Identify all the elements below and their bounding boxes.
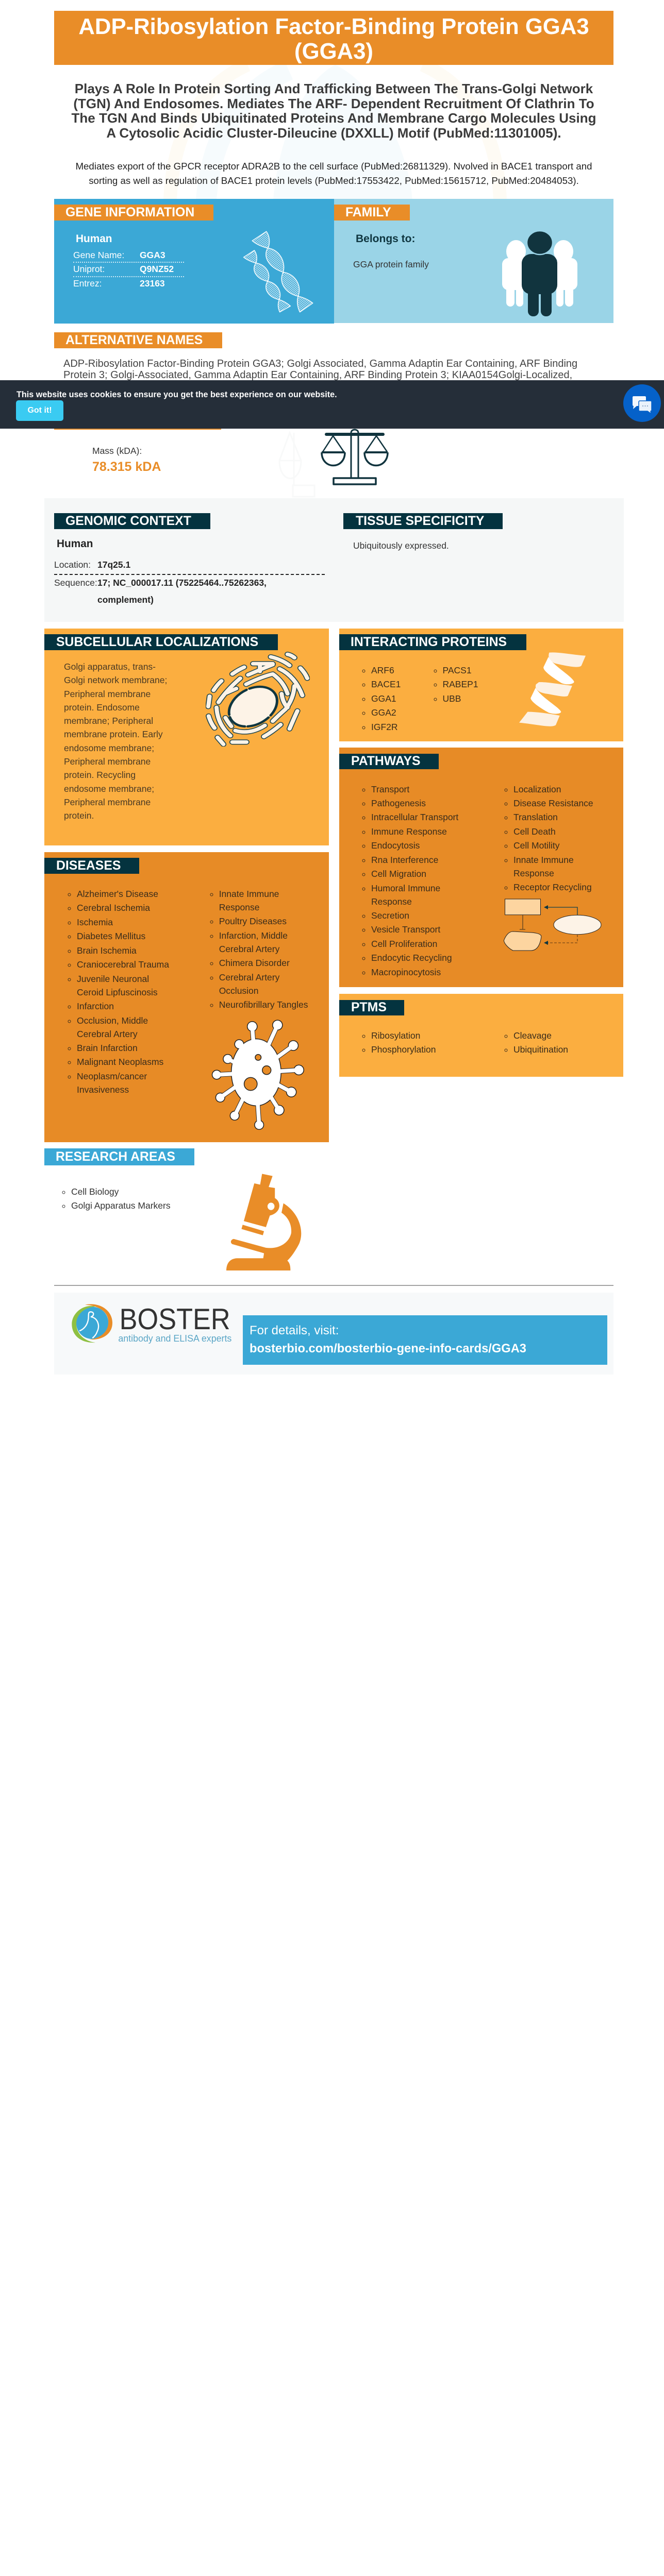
title: (GGA3): [294, 39, 373, 64]
localization text: protein. Recycling: [64, 770, 136, 780]
list: diseases column 1: Invasiveness: [77, 1084, 129, 1095]
localization text: protein.: [64, 810, 94, 821]
species label: Human: [57, 538, 93, 550]
list: diseases column 2: Occlusion: [219, 986, 259, 996]
list: diseases column 1: Malignant Neoplasms: [77, 1057, 163, 1067]
list: pathways column 1: Cell Migration: [371, 869, 426, 879]
heading: genomic context: GENOMIC CONTEXT: [65, 514, 191, 528]
list: pathways column 1: Secretion: [371, 910, 409, 921]
list: pathways column 1: Transport: [371, 784, 409, 794]
panel: gene information: GGA3: [140, 249, 165, 260]
cookie button: [16, 400, 63, 421]
list: pathways column 1: [362, 784, 459, 977]
panel: genomic context and tissue specificity: [44, 498, 624, 622]
icon: people group: [502, 231, 577, 316]
heading: ptms: PTMS: [351, 1001, 387, 1014]
family value: GGA protein family: [353, 259, 429, 269]
list: ptms column 2: [504, 1030, 568, 1055]
icon: chat button: [623, 384, 661, 422]
list: pathways column 1: Macropinocytosis: [371, 967, 441, 977]
list: proteins column 2: [434, 665, 478, 704]
uniprot row: Uniprot:: [73, 264, 105, 274]
list: pathways column 2: Response: [513, 868, 554, 878]
entrez row: Entrez:: [73, 278, 102, 289]
localization text: Peripheral membrane: [64, 756, 151, 767]
list: diseases column 2: Infarction, Middle: [219, 930, 288, 941]
panel: ptms: [339, 994, 623, 1077]
details url: bosterbio.com/bosterbio-gene-info-cards/GGA3: [250, 1342, 526, 1355]
heading: research areas: RESEARCH AREAS: [56, 1150, 175, 1164]
list: proteins column 1: BACE1: [371, 679, 401, 689]
list: proteins column 1: GGA1: [371, 693, 396, 704]
heading: alternative names: ALTERNATIVE NAMES: [65, 333, 203, 347]
heading: family: [334, 205, 410, 221]
list: diseases column 1: Neoplasm/cancer: [77, 1071, 147, 1081]
list: diseases column 1: Juvenile Neuronal: [77, 974, 149, 984]
list: diseases column 2: Chimera Disorder: [219, 958, 290, 968]
list: pathways column 1: Pathogenesis: [371, 798, 426, 808]
list: pathways column 2: Cell Motility: [513, 840, 559, 851]
uniprot row: [73, 264, 174, 274]
list: diseases column 1: Craniocerebral Trauma: [77, 959, 169, 970]
alternative names text: Protein 3; Golgi-Associated, Gamma Adaptin Ear Containing, ARF Binding Protein 3; KIAA0154Golgi-Localized,: [63, 369, 572, 381]
list: proteins column 1: GGA2: [371, 707, 396, 718]
tissue specificity text: Ubiquitously expressed.: [353, 540, 449, 551]
list: pathways column 1: Response: [371, 896, 412, 907]
mass value: 78.315 kDA: [92, 460, 161, 474]
summary heading text: (TGN) And Endosomes. Mediates The ARF- Dependent Recruitment Of Clathrin To: [73, 96, 594, 111]
heading: subcellular localizations: SUBCELLULAR LOCALIZATIONS: [56, 635, 258, 649]
heading: tissue specificity: TISSUE SPECIFICITY: [356, 514, 484, 528]
list: pathways column 2: Innate Immune: [513, 855, 574, 865]
icon: pathway diagram: [504, 899, 601, 951]
list: proteins column 2: PACS1: [442, 665, 472, 675]
list: pathways column 2: Receptor Recycling: [513, 882, 592, 892]
heading: research areas: [44, 1148, 194, 1165]
function description: Mediates export of the GPCR receptor ADRA2B to the cell surface (PubMed:26811329). Nvolved in BACE1 transport and: [75, 161, 592, 172]
logo: boster: [72, 1303, 231, 1344]
heading bar: molecular mass: [54, 412, 221, 430]
list: research areas: Cell Biology: [71, 1186, 119, 1196]
panel: footer: [54, 1293, 613, 1375]
title: [54, 11, 613, 65]
localization text: membrane; Peripheral: [64, 716, 153, 726]
alternative names text: [63, 358, 577, 381]
list: pathways column 1: Intracellular Transport: [371, 812, 458, 822]
list: diseases column 1: Alzheimer's Disease: [77, 889, 158, 899]
localization text: protein. Endosome: [64, 702, 140, 713]
panel: gene information: 23163: [140, 278, 165, 289]
mass label: Mass (kDA):: [92, 446, 142, 456]
panel: gene information: Q9NZ52: [140, 264, 174, 274]
summary heading text: The TGN And Binds Ubiquitinated Proteins And Membrane Cargo Molecules Using: [72, 110, 596, 126]
cookie banner: [0, 380, 664, 429]
list: pathways column 1: Rna Interference: [371, 855, 438, 865]
summary heading text: Plays A Role In Protein Sorting And Trafficking Between The Trans-Golgi Network: [75, 81, 593, 96]
panel: family: [334, 199, 613, 323]
sequence row: Sequence:: [54, 578, 97, 588]
function description: [75, 161, 592, 186]
heading: pathways: PATHWAYS: [351, 754, 421, 768]
entrez row: [73, 278, 165, 289]
heading: diseases: [44, 858, 139, 874]
summary heading text: A Cytosolic Acidic Cluster-Dileucine (DXXLL) Motif (PubMed:11301005).: [106, 125, 561, 140]
list: diseases column 1: Brain Infarction: [77, 1043, 138, 1053]
list: diseases column 1: Cerebral Artery: [77, 1028, 138, 1039]
localization text: Peripheral membrane: [64, 797, 151, 807]
list: proteins column 1: IGF2R: [371, 722, 398, 732]
list: diseases column 1: Occlusion, Middle: [77, 1015, 148, 1025]
panel: pathways: [339, 748, 623, 987]
list: pathways column 1: Immune Response: [371, 826, 447, 837]
list: ptms column 2: Ubiquitination: [513, 1044, 568, 1055]
list: proteins column 2: RABEP1: [442, 679, 478, 689]
sequence row: [54, 578, 267, 605]
list: ptms column 2: Cleavage: [513, 1030, 552, 1041]
list: pathways column 2: Localization: [513, 784, 561, 794]
list: proteins column 1: [362, 665, 401, 732]
list: pathways column 1: Endocytic Recycling: [371, 953, 452, 963]
cookie message: This website uses cookies to ensure you get the best experience on our website.: [16, 390, 337, 399]
details label: For details, visit:: [250, 1324, 339, 1337]
species label: Human: [76, 233, 112, 245]
list: diseases column 1: Ischemia: [77, 917, 113, 927]
heading: gene information: GENE INFORMATION: [65, 206, 194, 219]
list: pathways column 2: Translation: [513, 812, 558, 822]
function description: sorting as well as regulation of BACE1 protein levels (PubMed:17553422, PubMed:15615712, PubMed:20484053).: [89, 175, 579, 186]
location row: [54, 560, 130, 570]
heading: pathways: [339, 754, 439, 769]
summary heading text: [71, 81, 596, 140]
list: diseases column 1: [68, 889, 169, 1095]
sequence row: 17; NC_000017.11 (75225464..75262363,: [97, 578, 267, 588]
list: diseases column 2: [210, 889, 308, 1010]
panel: genomic context and tissue specificity: 17q25.1: [97, 560, 130, 570]
icon: dna: [243, 231, 313, 312]
callout: details link: [243, 1315, 607, 1365]
localization text: membrane protein. Early: [64, 729, 163, 739]
alternative names text: ADP-Ribosylation Factor-Binding Protein GGA3; Golgi Associated, Gamma Adaptin Ear Containing, ARF Binding: [63, 358, 577, 369]
gene name row: Gene Name:: [73, 249, 124, 260]
localization text: Golgi apparatus, trans-: [64, 662, 156, 672]
heading: diseases: DISEASES: [56, 859, 121, 873]
list: diseases column 2: Poultry Diseases: [219, 916, 287, 926]
panel: gene information: [54, 199, 334, 324]
list: diseases column 2: Neurofibrillary Tangles: [219, 999, 308, 1010]
list: pathways column 1: Vesicle Transport: [371, 924, 440, 935]
list: diseases column 1: Infarction: [77, 1001, 114, 1011]
localization text: [64, 662, 167, 821]
list: diseases column 1: Ceroid Lipfuscinosis: [77, 987, 158, 997]
gene name row: [73, 249, 165, 260]
list: diseases column 2: Innate Immune: [219, 889, 279, 899]
list: pathways column 2: [504, 784, 593, 892]
list: diseases column 1: Diabetes Mellitus: [77, 931, 145, 941]
list: proteins column 2: UBB: [442, 693, 461, 704]
list: diseases column 1: Cerebral Ischemia: [77, 903, 150, 913]
list: diseases column 2: Response: [219, 902, 260, 912]
location row: Location:: [54, 560, 91, 570]
title: ADP-Ribosylation Factor-Binding Protein GGA3: [78, 14, 589, 39]
icon: protein ribbon: [519, 652, 586, 726]
list: pathways column 1: Cell Proliferation: [371, 939, 437, 949]
localization text: Peripheral membrane: [64, 689, 151, 699]
panel: diseases: [44, 852, 329, 1142]
panel: interacting proteins: [339, 629, 623, 741]
icon: balance scale: [321, 429, 389, 485]
list: pathways column 1: Humoral Immune: [371, 883, 440, 893]
sequence row: complement): [97, 595, 154, 605]
list: diseases column 2: Cerebral Artery: [219, 972, 279, 982]
list: proteins column 1: ARF6: [371, 665, 394, 675]
heading: ptms: [339, 1000, 404, 1015]
cookie button: Got it!: [27, 406, 52, 415]
list: diseases column 2: Cerebral Artery: [219, 944, 279, 954]
localization text: Golgi network membrane;: [64, 675, 167, 685]
localization text: endosome membrane;: [64, 743, 154, 753]
list: ptms column 1: Phosphorylation: [371, 1044, 436, 1055]
list: diseases column 1: Brain Ischemia: [77, 945, 137, 956]
logo: boster: antibody and ELISA experts: [118, 1333, 231, 1344]
list: research areas: Golgi Apparatus Markers: [71, 1200, 171, 1211]
list: pathways column 2: Cell Death: [513, 826, 556, 837]
icon: golgi apparatus: [206, 652, 310, 747]
icon: microscope: [226, 1174, 301, 1270]
list: pathways column 1: Endocytosis: [371, 840, 420, 851]
icon: virus: [211, 1020, 304, 1130]
heading: family: FAMILY: [345, 206, 391, 219]
background watermark logo: [163, 65, 507, 199]
list: ptms column 1: [362, 1030, 436, 1055]
divider rule: [54, 1285, 613, 1286]
panel: subcellular localizations: [44, 629, 329, 845]
list: research areas: [62, 1186, 171, 1211]
localization text: endosome membrane;: [64, 784, 154, 794]
belongs to label: Belongs to:: [356, 233, 416, 245]
list: pathways column 2: Disease Resistance: [513, 798, 593, 808]
heading: interacting proteins: INTERACTING PROTEINS: [351, 635, 507, 649]
list: ptms column 1: Ribosylation: [371, 1030, 420, 1041]
